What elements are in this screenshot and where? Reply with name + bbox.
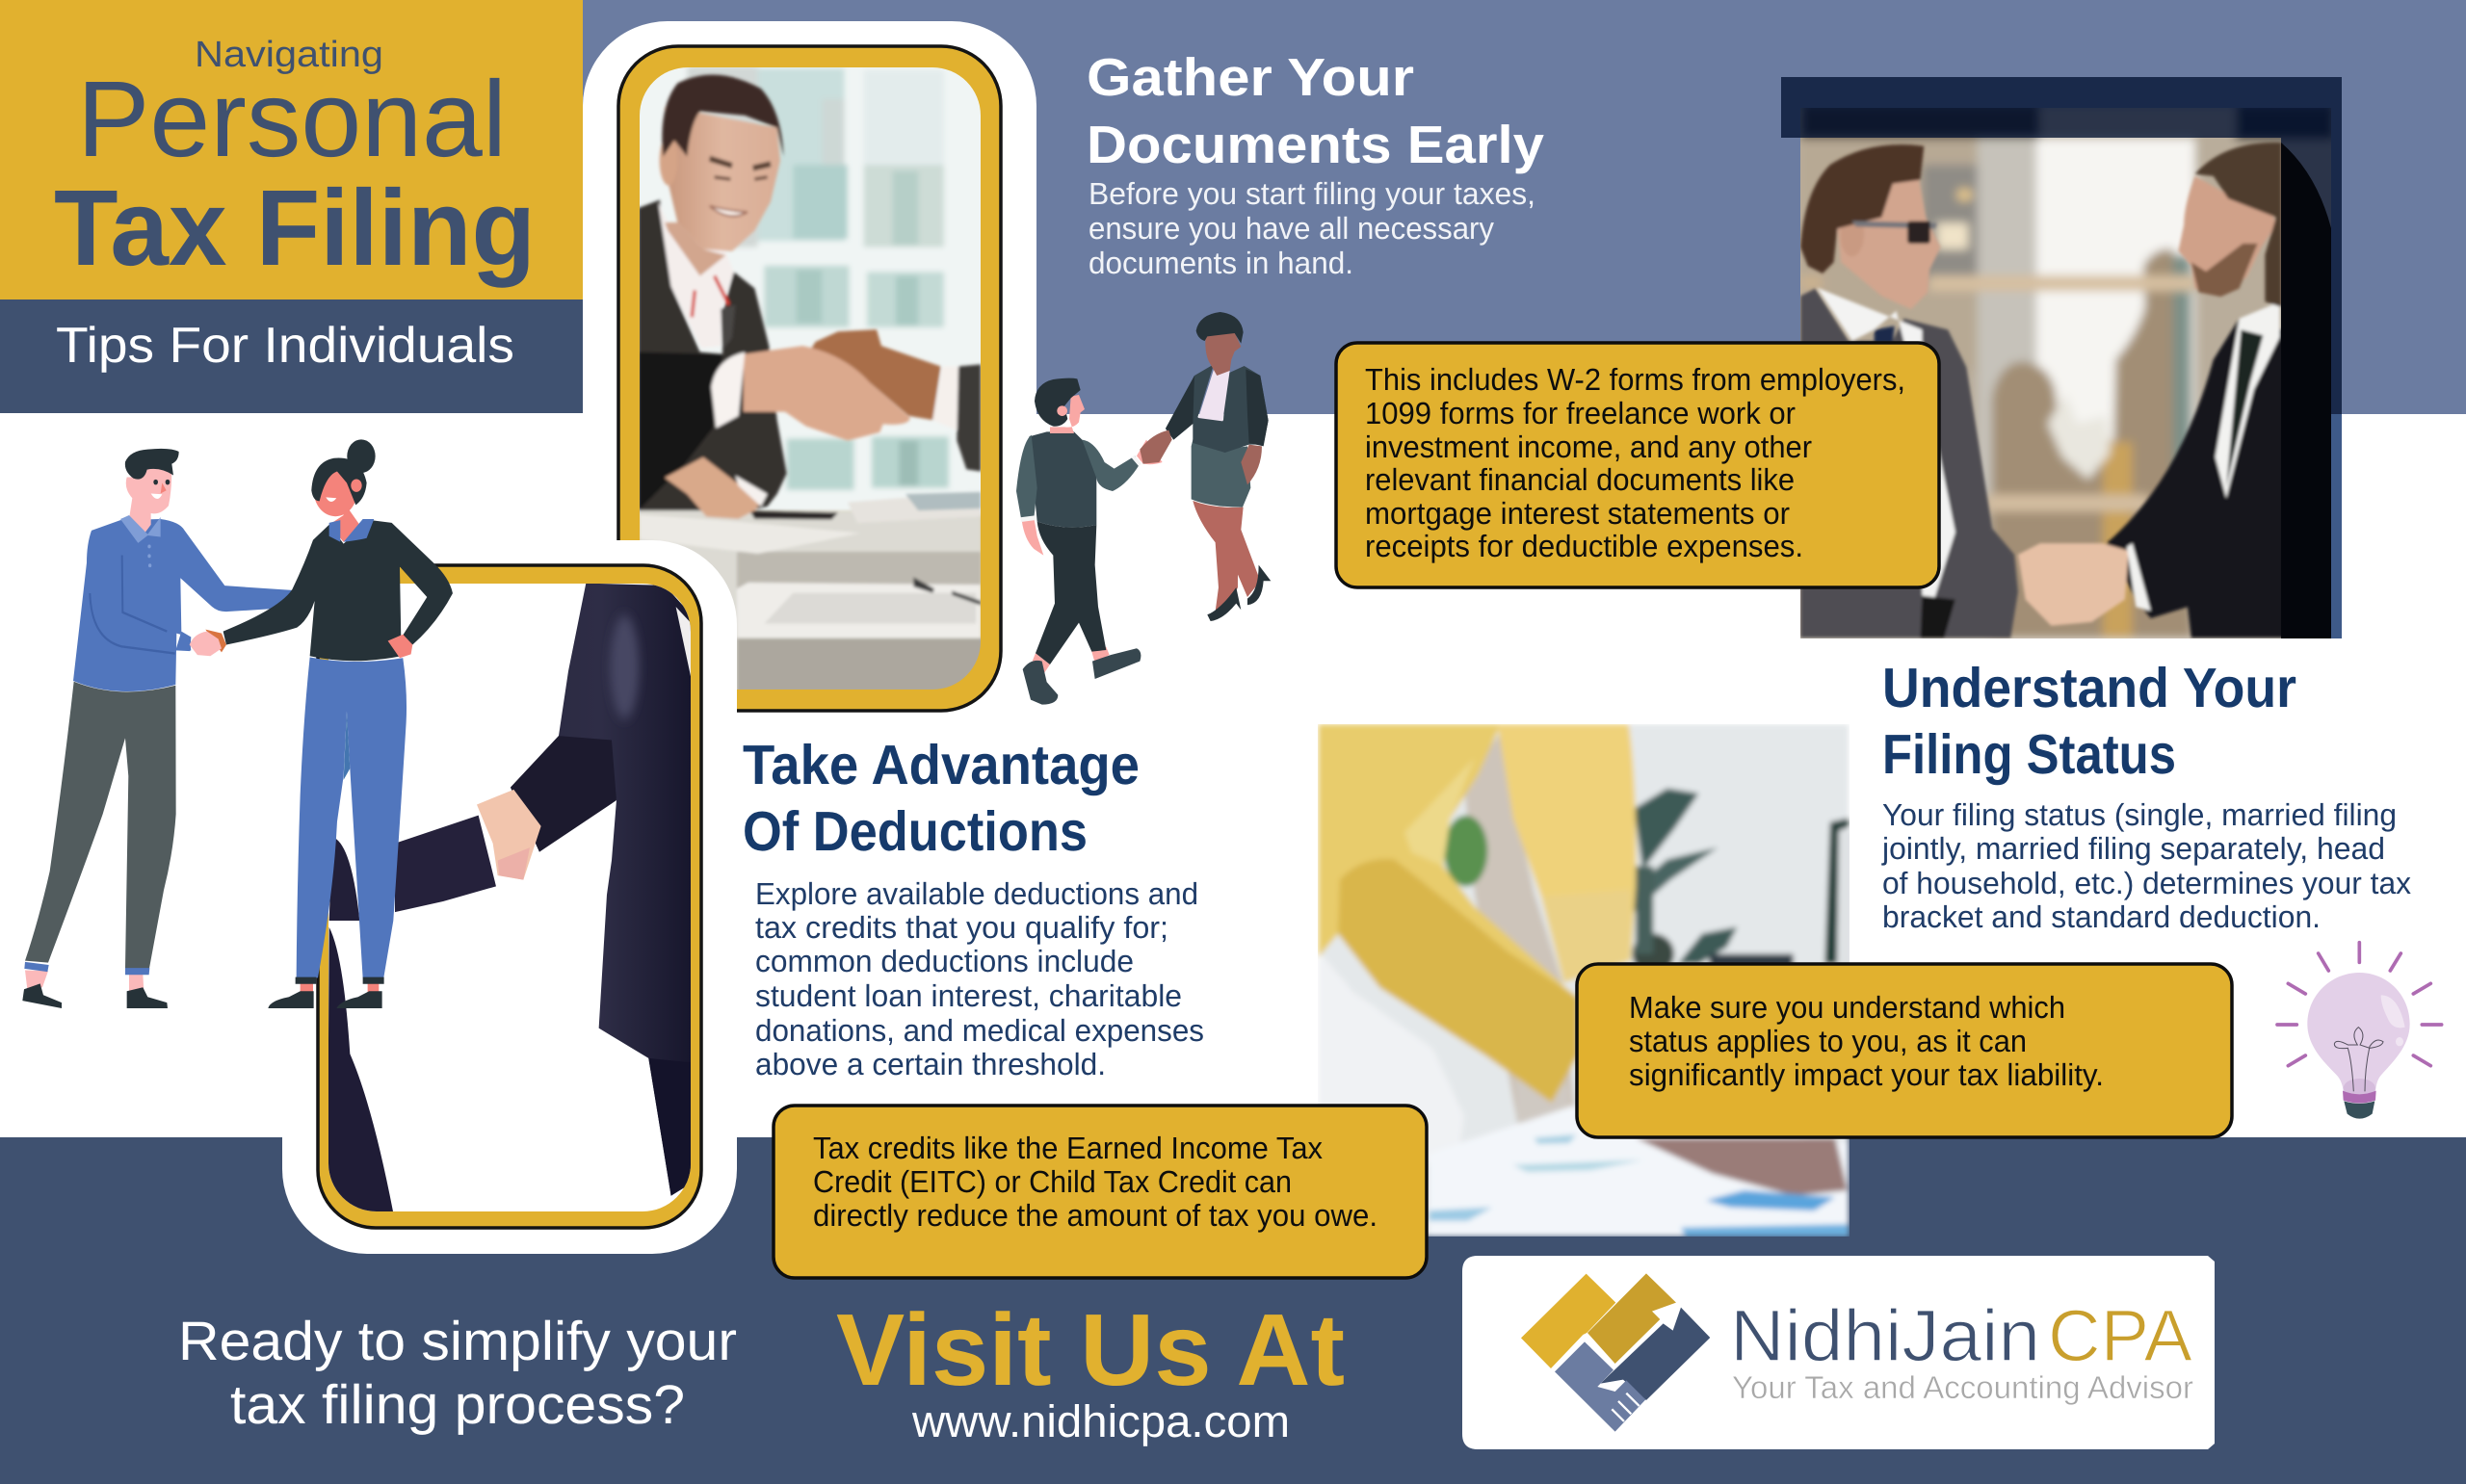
callout: tax credits: directly reduce the amount of tax you owe.: [813, 1198, 1377, 1233]
illustration: walking man and woman shaking hands: [1016, 312, 1271, 705]
body text: [755, 876, 1204, 1081]
callout: documents list: receipts for deductible expenses.: [1365, 529, 1803, 563]
callout: filing status tax liability: significantly impact your tax liability.: [1629, 1057, 2104, 1092]
callout: documents list: This includes W-2 forms from employers,: [1365, 362, 1905, 397]
heading: Take Advantage: [743, 734, 1140, 796]
logo CPA: CPA: [2048, 1295, 2192, 1377]
dark hair and jacket column: [2281, 143, 2331, 638]
photo: suits shaking hands: [328, 584, 692, 1213]
call to action: ready to simplify: tax filing process?: [230, 1374, 685, 1436]
the two men: [1800, 143, 2331, 638]
call to action: ready to simplify: Ready to simplify your: [178, 1311, 737, 1372]
body text: of household, etc.) determines your tax: [1882, 866, 2411, 900]
callout: filing status tax liability: Make sure you understand which: [1629, 990, 2065, 1025]
table: [639, 510, 982, 691]
plant leaves: [1634, 789, 1698, 870]
white shirt: [1320, 959, 1462, 1154]
section: understand your filing status: [1881, 657, 2411, 934]
body text: tax credits that you qualify for;: [755, 910, 1168, 945]
title: Personal: Personal: [77, 59, 507, 179]
body text: Your filing status (single, married filing: [1882, 797, 2397, 832]
blurred office background: [1782, 105, 2343, 640]
photo: businessman handshake: [626, 58, 992, 691]
gold frame: [618, 46, 1001, 711]
sleeves: [1318, 724, 1575, 998]
panel: top blue band: [583, 0, 2466, 414]
right man jacket: [2107, 299, 2331, 638]
translucent navy frame: [1781, 77, 2342, 638]
panel: lower handshake frame with dark suits: [282, 540, 737, 1254]
heading line two: Of Deductions: [743, 800, 1088, 863]
panel: bottom navy band: [0, 1137, 2466, 1484]
callout: documents list: 1099 forms for freelance work or: [1365, 396, 1796, 430]
callout: documents list: investment income, and any other: [1365, 430, 1812, 464]
panel: navy subtitle block: [0, 299, 583, 413]
white frame: [282, 540, 737, 1254]
clasped hands: [2018, 543, 2129, 626]
photo: colleague in yellow sweater at a desk: [1319, 724, 1852, 1237]
photo: two businessmen shaking hands with navy overlay: [1781, 77, 2343, 640]
body text: donations, and medical expenses: [755, 1013, 1204, 1048]
logo wordmark: NidhiJain: [1730, 1295, 2040, 1377]
callout: filing status tax liability: status applies to you, as it can: [1629, 1024, 2027, 1058]
callout: documents list: relevant financial documents like: [1365, 462, 1795, 497]
title: Tax Filing: Tax Filing: [54, 168, 536, 288]
body text: bracket and standard deduction.: [1882, 899, 2321, 934]
man: [22, 449, 292, 1008]
call to action: ready to simplify: [178, 1311, 737, 1436]
inner white panel: [328, 584, 691, 1211]
woman: [223, 439, 453, 1008]
section: gather your documents early: [1087, 47, 1544, 280]
gold frame: [318, 565, 701, 1228]
body text: ensure you have all necessary: [1089, 211, 1494, 246]
heading line two: Filing Status: [1882, 723, 2176, 786]
body text: [1881, 797, 2411, 934]
panel: tall handshake frame with smiling businessman: [583, 21, 1036, 736]
frame edge over white: [2331, 414, 2342, 638]
body text: above a certain threshold.: [755, 1047, 1106, 1081]
call to action: visit us at: Visit Us At: [836, 1293, 1345, 1407]
heading line two: Documents Early: [1087, 115, 1544, 174]
walking man: [1016, 378, 1163, 705]
head: [665, 107, 780, 251]
desk and papers: [1430, 1106, 1849, 1237]
callout: filing status tax liability: [1577, 964, 2232, 1137]
panel: NidhiJain CPA logo: [1462, 1256, 2215, 1449]
fist: [665, 457, 768, 519]
icon: light bulb: [2277, 943, 2442, 1119]
logo tagline: Your Tax and Accounting Advisor: [1732, 1369, 2193, 1405]
blurred window background: [626, 58, 992, 514]
title: Navigating: Navigating: [195, 35, 383, 75]
hands: [801, 329, 941, 420]
monitor: [1824, 819, 1849, 964]
body text: common deductions include: [755, 944, 1134, 978]
illustration: cartoon man and woman shaking hands: [22, 439, 453, 1008]
body text: documents in hand.: [1089, 246, 1353, 280]
callout: tax credits: Tax credits like the Earned Income Tax: [813, 1131, 1323, 1165]
businessman and table: [639, 75, 984, 691]
right man head: [2178, 176, 2276, 296]
callout: tax credits: [774, 1106, 1427, 1278]
panel: gold title block: [0, 0, 583, 299]
subtitle: Tips For Individuals: Tips For Individuals: [56, 318, 514, 374]
body text: Before you start filing your taxes,: [1089, 176, 1535, 211]
body text: student loan interest, charitable: [755, 978, 1182, 1013]
icon: logo handshake diamond: [1521, 1273, 1710, 1432]
title block text: [54, 35, 536, 374]
heading: Understand Your: [1882, 657, 2296, 719]
callout: tax credits: Credit (EITC) or Child Tax Credit can: [813, 1164, 1292, 1199]
callout: documents list: [1336, 343, 1939, 587]
heading: Gather Your: [1087, 47, 1414, 107]
callout: documents list: mortgage interest statements or: [1365, 496, 1790, 531]
body text: Explore available deductions and: [755, 876, 1198, 911]
body text: jointly, married filing separately, head: [1881, 831, 2385, 866]
section: take advantage of deductions: [743, 734, 1204, 1081]
left man head: [1837, 176, 1941, 309]
body text: [1089, 176, 1535, 280]
shaking hands: [205, 630, 226, 652]
website address: www.nidhicpa.com: [911, 1395, 1290, 1446]
white frame: [583, 21, 1036, 736]
businesswoman: [1140, 312, 1271, 621]
